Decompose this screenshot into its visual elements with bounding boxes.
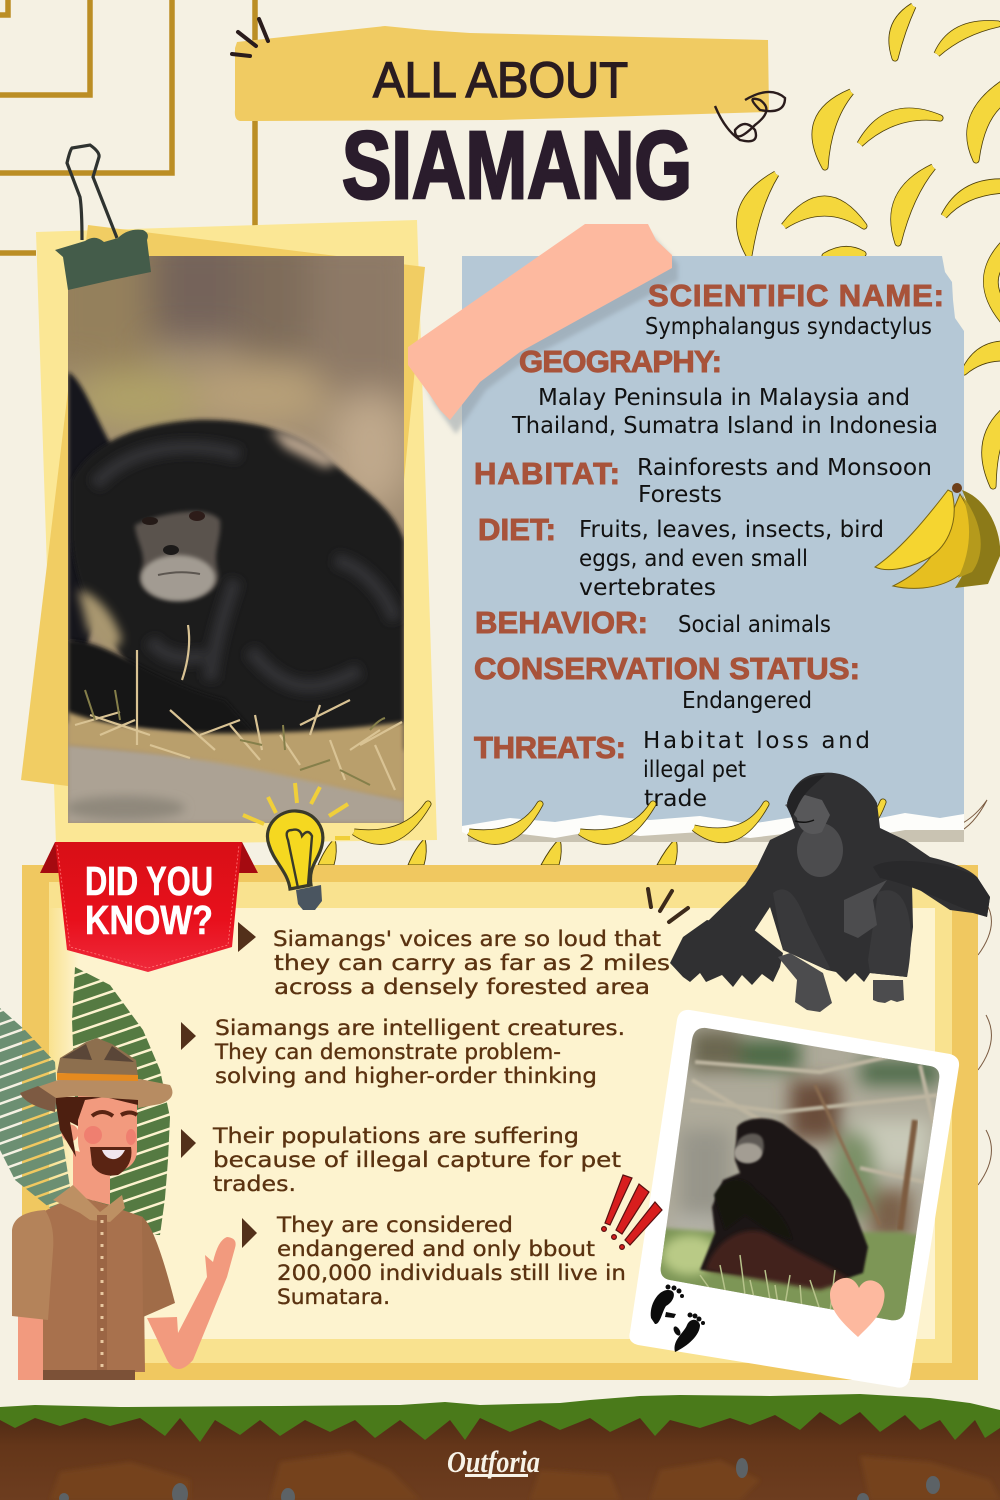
- info: threats: trade: [644, 786, 707, 812]
- ranger: neck: [73, 1150, 110, 1205]
- info: geography: Malay Peninsula in Malaysia and: [538, 385, 910, 411]
- ranger: sleeves: [12, 1210, 53, 1320]
- fact 4: [276, 1213, 626, 1309]
- fact 4: They are considered: [276, 1213, 513, 1237]
- siamang: chest: [797, 823, 843, 877]
- fur highlights: [95, 447, 395, 686]
- fact 2: [214, 1016, 625, 1088]
- straw gap: [78, 590, 122, 655]
- info: conservation status: [474, 651, 860, 714]
- info: diet: Fruits, leaves, insects, bird: [579, 517, 884, 543]
- did you know ribbon: DID YOU: [85, 858, 213, 904]
- torn panel shadow: [468, 830, 964, 842]
- ranger: cheeks: [84, 1126, 102, 1144]
- ranger: hat crown: [57, 1038, 138, 1077]
- banana bunch: [875, 483, 1000, 588]
- fact 4: Sumatara.: [277, 1285, 390, 1309]
- hanging siamang illustration: [670, 773, 990, 1012]
- lightbulb icon: [243, 783, 350, 910]
- info: scientific name: SCIENTIFIC NAME:: [648, 278, 944, 313]
- info: geography: GEOGRAPHY:: [519, 344, 722, 379]
- ranger character: [12, 1038, 236, 1380]
- info: behavior: [475, 605, 831, 640]
- banana pattern: lower row: [318, 800, 991, 1185]
- siamang: fur body: [707, 773, 990, 982]
- muzzle: [141, 555, 215, 601]
- title sparkle marks: [232, 19, 268, 56]
- did you know ribbon: KNOW?: [85, 897, 213, 943]
- info: diet: DIET:: [478, 512, 556, 547]
- photo: siamang: [700, 1118, 868, 1283]
- arm: [68, 638, 214, 735]
- photo: arm: [714, 1179, 792, 1240]
- ranger: arm and waving hand: [147, 1237, 236, 1369]
- info: scientific name: Symphalangus syndactylus: [645, 314, 932, 340]
- hair tuft: [270, 430, 340, 468]
- polaroid frame: [629, 1010, 959, 1388]
- fact 1: Siamangs' voices are so loud that: [273, 927, 661, 951]
- did you know ribbon: [40, 842, 258, 972]
- siamang: leg shading: [773, 889, 830, 970]
- siamang body: [72, 420, 404, 750]
- fact 3: [212, 1124, 621, 1196]
- info: diet: eggs, and even small: [579, 546, 808, 572]
- ranger: brows: [92, 1112, 137, 1116]
- photo: foreground grass: [700, 1255, 835, 1312]
- info: geography: [511, 344, 938, 439]
- fern leaves: [0, 967, 170, 1235]
- ranger: hat brim: [20, 1079, 172, 1112]
- panel: did you know frame: [22, 865, 978, 1380]
- ranger: hair: [55, 1097, 138, 1157]
- siamang: foot: [873, 980, 904, 1003]
- ranger: placket and buttons: [97, 1215, 107, 1372]
- info: habitat: Rainforests and Monsoon: [637, 455, 932, 481]
- photo: siamang resting on grass: [68, 256, 404, 823]
- fact 4: endangered and only bbout: [277, 1237, 595, 1261]
- footprints: [651, 1284, 705, 1352]
- info: threats: [474, 728, 870, 812]
- siamang: face: [785, 795, 830, 834]
- photo: grass: [660, 1226, 916, 1320]
- fact 4: 200,000 individuals still live in: [277, 1261, 626, 1285]
- info: behavior: BEHAVIOR:: [475, 605, 648, 640]
- fact 2: Siamangs are intelligent creatures.: [215, 1016, 625, 1040]
- motion marks: [648, 889, 688, 922]
- photo: siamang sitting in enclosure: [660, 1028, 940, 1320]
- ranger: hat band: [57, 1073, 138, 1081]
- banana pattern: top right: [740, 6, 1000, 486]
- info: threats: illegal pet: [643, 757, 746, 783]
- panel: species facts: [462, 256, 964, 830]
- ground: [68, 745, 404, 823]
- binder clip: [55, 145, 151, 290]
- fact 3: Their populations are suffering: [212, 1124, 579, 1148]
- outforia logo: Outforia: [447, 1444, 540, 1479]
- photo: reddish lower fur: [705, 1231, 850, 1290]
- ranger: face: [78, 1095, 137, 1172]
- photo: face: [735, 1134, 764, 1163]
- tape shadow: [412, 233, 678, 434]
- info: diet: vertebrates: [579, 575, 716, 601]
- fact 2: They can demonstrate problem-: [214, 1040, 561, 1064]
- info: habitat: HABITAT:: [474, 456, 620, 491]
- siamang: forearm fur: [670, 920, 783, 987]
- info: conservation status: Endangered: [682, 688, 812, 714]
- grass blades: [75, 625, 402, 790]
- info: diet: [478, 512, 884, 601]
- info: behavior: Social animals: [678, 612, 831, 638]
- title: ALL ABOUT: ALL ABOUT: [373, 52, 628, 108]
- torn paper edge: [462, 813, 964, 838]
- info: habitat: Forests: [638, 482, 722, 508]
- info: threats: Habitat loss and: [643, 728, 870, 754]
- heart: [830, 1278, 885, 1337]
- fact 1: they can carry as far as 2 miles: [274, 951, 670, 975]
- peach tape: [408, 224, 672, 420]
- exclamation marks: [602, 1175, 662, 1249]
- ground: soil: [0, 1411, 1000, 1500]
- ground: stones: [59, 1458, 940, 1500]
- title tape: [235, 26, 769, 121]
- sticky note backing: light: [36, 220, 437, 845]
- ranger: belt: [43, 1370, 135, 1380]
- info: conservation status: CONSERVATION STATUS:: [474, 651, 860, 686]
- info: habitat: [474, 455, 932, 508]
- fact 1: [273, 927, 670, 999]
- banana row over torn edge: [354, 802, 883, 841]
- ranger: shirt: [43, 1195, 145, 1372]
- ranger: collar: [53, 1185, 125, 1222]
- info: scientific name: [645, 278, 944, 340]
- info: threats: THREATS:: [474, 730, 626, 765]
- ranger: smile: [102, 1150, 125, 1159]
- background siamang: [68, 372, 116, 650]
- fact 2: solving and higher-order thinking: [215, 1064, 597, 1088]
- ranger: left arm: [18, 1315, 45, 1380]
- photo: ropes: [690, 1045, 940, 1182]
- info: geography: Thailand, Sumatra Island in Indonesia: [511, 413, 938, 439]
- scribble swirl: [715, 92, 785, 141]
- ranger: beard: [90, 1147, 131, 1176]
- ground: grass: [0, 1394, 1000, 1442]
- fact 3: trades.: [213, 1172, 296, 1196]
- title: SIAMANG: SIAMANG: [342, 112, 692, 219]
- arrow bullets: [181, 922, 257, 1248]
- fact 1: across a densely forested area: [274, 975, 650, 999]
- sticky note backing: dark: [21, 225, 425, 786]
- decorative maze lines: [0, 0, 255, 253]
- siamang: hand: [844, 880, 887, 938]
- fact 3: because of illegal capture for pet: [213, 1148, 621, 1172]
- upper face: [135, 511, 220, 600]
